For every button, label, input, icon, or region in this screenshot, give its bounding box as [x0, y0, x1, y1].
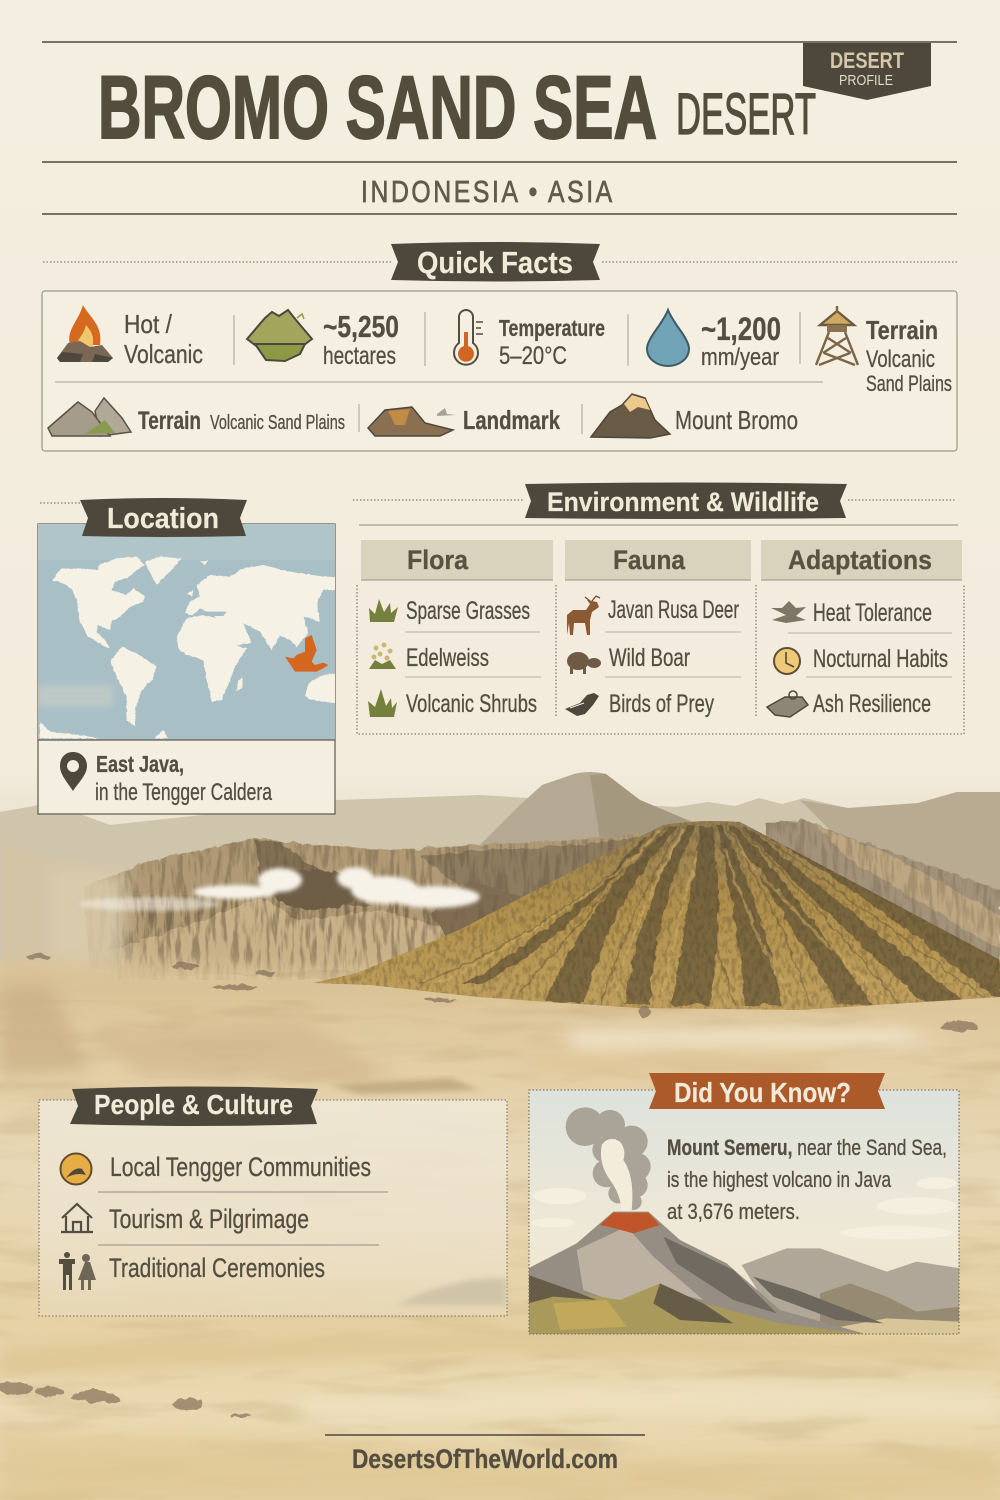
fact: mount bromo: Mount Bromo: [675, 405, 798, 435]
panel: quick facts: [42, 242, 957, 451]
fact: terrain row 2: Terrain: [138, 407, 201, 435]
column: flora: Flora: [407, 545, 469, 575]
icon: deer: [567, 596, 600, 635]
did you know text: Mount Semeru, near the Sand Sea,: [667, 1135, 947, 1160]
column: flora: Edelweiss: [406, 644, 489, 672]
lower desert ground: [0, 1078, 1000, 1500]
did you know text: at 3,676 meters.: [667, 1199, 800, 1224]
icon: flat-top volcano: [368, 407, 456, 436]
fact: rainfall: [647, 310, 781, 371]
sand plain streaks: [0, 985, 950, 1080]
fact: terrain tower: Sand Plains: [866, 371, 952, 396]
badge: desert profile: PROFILE: [839, 72, 893, 89]
panel: environment and wildlife: [353, 482, 964, 734]
fact: rainfall: mm/year: [701, 344, 779, 371]
column: adaptations: Adaptations: [788, 545, 932, 575]
right hazy hills: [766, 818, 1000, 960]
panel: location: [38, 498, 337, 814]
fact: landmark: [368, 405, 560, 436]
volcano illustration: [528, 1090, 960, 1337]
panel: people and culture: [39, 1086, 507, 1316]
icon: water drop: [647, 310, 689, 366]
header: [42, 42, 957, 214]
fact: rainfall: ~1,200: [701, 311, 781, 347]
fact: terrain tower: [816, 306, 952, 396]
icon: grass: [369, 599, 398, 622]
icon: heat tolerance: [771, 601, 806, 623]
people banner: People & Culture: [94, 1089, 293, 1120]
fact: landmark: Landmark: [463, 405, 560, 435]
icon: bird: [565, 693, 599, 720]
haze over the caldera base: [0, 870, 470, 1000]
icon: snow-capped volcano: [591, 394, 670, 438]
fact: climate: Volcanic: [124, 339, 203, 369]
location banner: [80, 498, 247, 537]
icon: lookout tower: [816, 306, 858, 365]
smoke plume: [566, 1107, 651, 1210]
column: fauna: Javan Rusa Deer: [608, 596, 739, 624]
item: local communities: Local Tengger Communities: [110, 1152, 371, 1182]
column: fauna: Wild Boar: [609, 644, 690, 672]
location text: [95, 751, 272, 806]
world map: [38, 524, 337, 740]
title: BROMO SAND SEA: [98, 57, 657, 157]
scattered shrubs on the plain: [26, 954, 978, 1031]
item: tourism: [61, 1204, 379, 1245]
column: flora: [361, 540, 553, 718]
Batok cone with ribs: [300, 815, 1000, 1015]
fact: temperature: [454, 310, 605, 370]
fact: area: ~5,250: [323, 309, 399, 344]
distant dunes: [395, 1278, 506, 1305]
item: tourism: Tourism & Pilgrimage: [109, 1204, 309, 1234]
location banner: Location: [107, 503, 219, 535]
column: adaptations: Nocturnal Habits: [813, 645, 948, 673]
column: fauna: Fauna: [613, 545, 686, 575]
quick facts banner: Quick Facts: [417, 245, 573, 280]
location box: [38, 524, 335, 814]
fact: area: [247, 309, 399, 370]
foreground hills: [529, 1284, 865, 1334]
item: ceremonies: [59, 1252, 325, 1290]
icon: boar: [567, 652, 601, 674]
fact: mount bromo: [591, 394, 798, 438]
icon: shrub: [368, 689, 397, 717]
icon: edelweiss: [369, 642, 396, 669]
did you know banner: Did You Know?: [674, 1077, 851, 1108]
Bromo crater: [271, 870, 359, 910]
caldera range: [80, 830, 650, 990]
fact: temperature: Temperature: [499, 315, 605, 341]
column: adaptations: Ash Resilience: [813, 690, 931, 718]
steam clouds: [80, 867, 480, 911]
column: flora: Sparse Grasses: [406, 597, 530, 625]
fact: terrain row 2: Volcanic Sand Plains: [210, 412, 345, 434]
illustration: Bromo caldera landscape: [0, 772, 1000, 1500]
fact: terrain row 2: [48, 398, 345, 436]
fact: temperature: 5–20°C: [499, 342, 567, 370]
sand plain texture: [0, 1000, 1000, 1500]
second mountain: [742, 1248, 959, 1322]
location text: East Java,: [96, 751, 184, 777]
column: adaptations: [761, 540, 962, 718]
erupting volcano: [528, 1212, 887, 1337]
icon: thermometer: [454, 310, 483, 365]
footer: DesertsOfTheWorld.com: [352, 1444, 618, 1474]
left hazy hills: [0, 845, 150, 965]
icon: grey peaks: [48, 398, 131, 436]
facts box: [42, 291, 957, 451]
environment banner: Environment & Wildlife: [547, 487, 819, 517]
icon: flame on rocks: [57, 305, 113, 362]
did you know text: is the highest volcano in Java: [667, 1167, 892, 1192]
fact: terrain tower: Terrain: [866, 315, 938, 345]
fact: climate: Hot /: [124, 309, 173, 339]
subtitle: INDONESIA • ASIA: [361, 174, 612, 209]
fact: area: hectares: [323, 342, 396, 370]
icon: clock: [774, 648, 800, 674]
badge: desert profile: [803, 43, 931, 100]
icon: ash mound: [767, 691, 808, 717]
column: flora: Volcanic Shrubs: [406, 690, 537, 718]
did you know text: [667, 1135, 947, 1224]
column: fauna: Birds of Prey: [609, 690, 714, 718]
panel: did you know: [528, 1073, 960, 1337]
item: ceremonies: Traditional Ceremonies: [109, 1253, 325, 1283]
icon: map pin: [60, 752, 87, 791]
column: adaptations: Heat Tolerance: [813, 599, 932, 627]
badge: desert profile: DESERT: [830, 48, 904, 73]
column: fauna: [565, 540, 751, 720]
desert shrubs: [0, 1382, 251, 1418]
title suffix: DESERT: [676, 82, 816, 147]
location text: in the Tengger Caldera: [95, 779, 272, 806]
fact: terrain tower: Volcanic: [866, 346, 935, 373]
icon: green mountain: [247, 310, 312, 361]
far ridge: [0, 792, 1000, 960]
distant volcano: [480, 772, 697, 850]
item: local communities: [60, 1152, 388, 1192]
fact: climate: [57, 305, 203, 369]
